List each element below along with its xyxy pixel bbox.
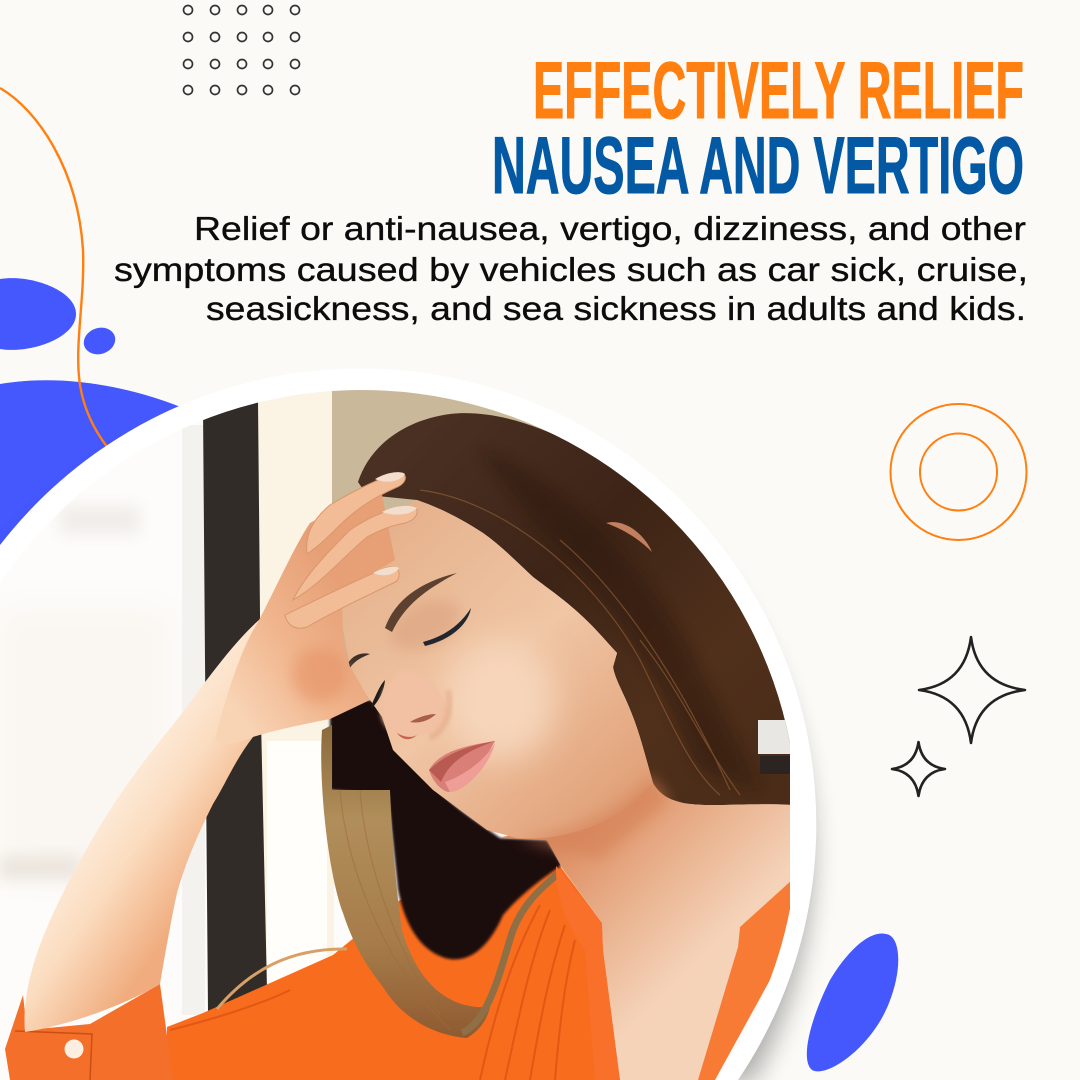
icon: small sparkle — [892, 742, 945, 796]
shirt button — [64, 1040, 84, 1058]
ring shadow — [6, 400, 812, 1080]
palm shading — [292, 647, 348, 703]
ear highlight — [606, 522, 652, 552]
fingernails — [373, 472, 417, 575]
dot grid — [184, 6, 300, 94]
window detail — [758, 720, 790, 774]
blue leaf — [807, 933, 898, 1071]
upper hair — [358, 413, 810, 806]
lower hair: dark core — [330, 700, 562, 959]
shirt collar right — [698, 880, 792, 1080]
shirt cuff stripe — [15, 1031, 92, 1080]
thin hair strand — [217, 949, 347, 1009]
left eyebrow — [348, 653, 370, 668]
blue shape behind photo — [0, 380, 200, 560]
lips — [429, 741, 495, 792]
concentric circles — [890, 404, 1026, 540]
hair shading — [495, 461, 752, 784]
forearm — [24, 620, 260, 1032]
left eye lashes — [371, 680, 385, 708]
right eye lashes — [423, 608, 471, 646]
white ring — [0, 368, 816, 1080]
eye socket shading — [391, 600, 460, 650]
description text: seasickness, and sea sickness in adults and kids. — [206, 290, 1026, 327]
nose — [381, 670, 449, 739]
description text: Relief or anti-nausea, vertigo, dizziness, and other — [194, 210, 1026, 247]
icon: large sparkle — [919, 637, 1025, 743]
jaw shadow — [517, 775, 670, 860]
right eyebrow — [385, 573, 457, 632]
photo background — [0, 390, 552, 1015]
face — [333, 500, 653, 838]
shirt — [5, 866, 620, 1080]
description text — [114, 210, 1028, 327]
shirt collar left — [556, 866, 620, 1080]
description text: symptoms caused by vehicles such as car sick, cruise, — [114, 251, 1028, 288]
hand — [215, 485, 395, 743]
fingers — [285, 473, 417, 628]
orange curve — [0, 88, 108, 448]
hair strands — [340, 490, 740, 954]
shirt folds — [170, 905, 575, 1080]
photo: woman holding her head — [0, 385, 810, 1080]
cheek highlight — [445, 640, 555, 760]
neck — [500, 783, 795, 1080]
blue dot — [80, 324, 119, 358]
lower hair: tan strands — [321, 725, 490, 1038]
blue blob: upper left — [0, 278, 76, 350]
title — [492, 46, 1024, 211]
hair curl strand — [462, 872, 560, 1033]
